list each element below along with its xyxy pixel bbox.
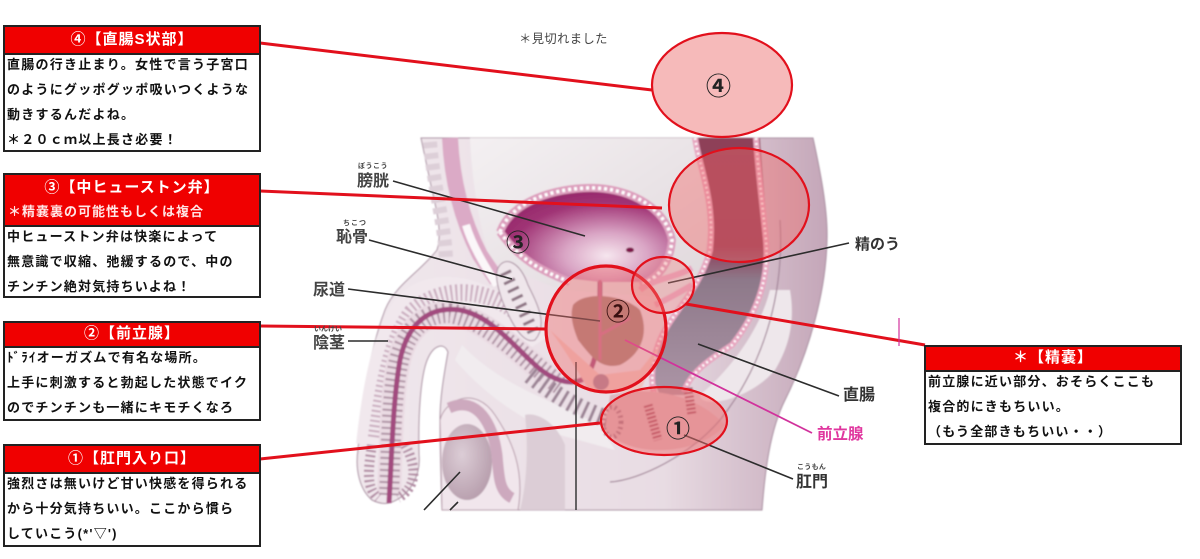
panel text seminal vesicle: 複合的にきもちいい。	[928, 399, 1070, 414]
label: penis	[313, 325, 345, 352]
panel text ④	[7, 57, 249, 147]
panel text ①: していこう(*'▽')	[7, 526, 118, 541]
pink tick	[898, 318, 900, 346]
label: bladder: 膀胱	[357, 172, 389, 190]
label: urethra: 尿道	[313, 281, 345, 299]
panel heading seminal vesicle	[926, 347, 1180, 372]
panel text ③: 無意識で収縮、弛緩するので、中の	[7, 254, 234, 269]
panel: ② prostate	[3, 321, 261, 421]
abdominal cavity	[470, 138, 712, 300]
highlight: anus ①	[601, 387, 727, 455]
label: bladder: ぼうこう	[358, 161, 388, 170]
penis shaft	[369, 292, 560, 498]
panel text ③: チンチン絶対気持ちいよね！	[7, 279, 191, 294]
leader line: vertical lower	[575, 362, 577, 510]
highlight: seminal vesicle	[632, 257, 694, 313]
panel text ④: 直腸の行き止まり。女性で言う子宮口	[7, 57, 249, 72]
highlight: prostate ②	[546, 266, 666, 392]
leader line: urethra	[348, 289, 600, 321]
label: anus	[796, 462, 828, 491]
panel text ④: ＊２０ｃｍ以上長さ必要！	[7, 132, 178, 147]
panel text ①: 強烈さは無いけど甘い快感を得られる	[7, 476, 248, 491]
panel text ②: ﾄﾞﾗｲオーガズムで有名な場所。	[7, 350, 207, 365]
panel text seminal vesicle: 前立腺に近い部分、おそらくここも	[928, 374, 1155, 389]
panel: ④ rectosigmoid	[3, 25, 261, 152]
leader line: rectum	[698, 344, 839, 396]
panel text seminal vesicle: （もう全部きもちいい・・）	[928, 424, 1112, 439]
testis and scrotum	[440, 398, 565, 510]
leader line: bladder	[393, 181, 585, 236]
panel text ②	[7, 350, 248, 415]
leader line: penis	[348, 340, 388, 342]
panel heading ③	[5, 175, 259, 227]
marker ④: ④	[706, 73, 731, 101]
panel text ④: 動きするんだよね。	[7, 107, 135, 122]
panel heading ③: ＊精嚢裏の可能性もしくは複合	[8, 204, 204, 219]
leader line: anus	[684, 435, 793, 479]
panel heading ②	[5, 323, 259, 348]
panel heading ①	[5, 446, 259, 474]
connector ②	[260, 326, 546, 329]
leader line: prostate	[625, 340, 812, 433]
prostate tissue	[550, 280, 660, 392]
panel: seminal vesicle	[924, 345, 1182, 445]
panel text ④: のようにグッポグッポ吸いつくような	[7, 82, 249, 97]
perineal lower band	[455, 345, 615, 450]
panel heading ②: ②【前立腺】	[84, 325, 180, 342]
label: seminal vesicle: 精のう	[855, 235, 900, 253]
bladder	[500, 188, 672, 285]
highlight: ③ region	[669, 148, 809, 262]
urethra	[389, 278, 600, 503]
note: cut off: ＊見切れました	[519, 32, 608, 46]
connector ④	[260, 43, 652, 90]
panel text seminal vesicle	[928, 374, 1155, 439]
label: penis: いんけい	[314, 325, 342, 333]
panel: ① anal entrance	[3, 444, 261, 547]
connector seminal vesicle	[686, 304, 925, 345]
panel text ①: から十分気持ちいい。ここから慣ら	[7, 501, 234, 516]
label: anus: 肛門	[796, 473, 828, 491]
leader line: seminal vesicle	[668, 243, 849, 283]
leader lines: scrotum	[424, 472, 460, 510]
panel text ②: 上手に刺激すると勃起した状態でイク	[7, 375, 248, 390]
label: rectum: 直腸	[843, 385, 875, 404]
panel heading ④	[5, 27, 259, 55]
connector ③	[260, 191, 662, 208]
panel heading ①: ①【肛門入り口】	[68, 450, 196, 467]
outer right contour	[610, 220, 781, 482]
abdominal wall band	[450, 138, 497, 280]
label: pubic bone: 恥骨	[336, 228, 368, 246]
pubic bone	[497, 262, 541, 341]
panel heading seminal vesicle: ＊【精嚢】	[1013, 349, 1093, 366]
leader line: pubic bone	[369, 240, 512, 279]
label: pubic bone: ちこつ	[343, 219, 367, 227]
label: bladder	[357, 161, 389, 190]
highlight: rectosigmoid ④	[652, 33, 792, 137]
label: pubic bone	[336, 219, 368, 246]
label: anus: こうもん	[797, 462, 826, 471]
panel heading ③: ③【中ヒューストン弁】	[44, 179, 220, 196]
panel text ②: のでチンチンも一緒にキモチくなろ	[7, 400, 234, 415]
marker ③: ③	[506, 230, 530, 257]
anal canal tissue	[603, 388, 725, 450]
panel text ③	[7, 229, 234, 294]
marker ①: ①	[666, 416, 690, 443]
panel: ③ middle Houston valve	[3, 173, 261, 298]
label: penis: 陰茎	[313, 334, 345, 352]
panel heading ④: ④【直腸S状部】	[70, 31, 194, 48]
panel text ①	[7, 476, 248, 541]
anatomy illustration	[357, 138, 827, 510]
body silhouette	[357, 138, 827, 510]
label: prostate: 前立腺	[817, 424, 864, 443]
seminal vesicle tissue	[640, 268, 692, 305]
rectum	[652, 138, 792, 402]
connector ①	[260, 423, 600, 459]
marker ②: ②	[606, 299, 630, 326]
panel text ③: 中ヒューストン弁は快楽によって	[7, 229, 218, 244]
